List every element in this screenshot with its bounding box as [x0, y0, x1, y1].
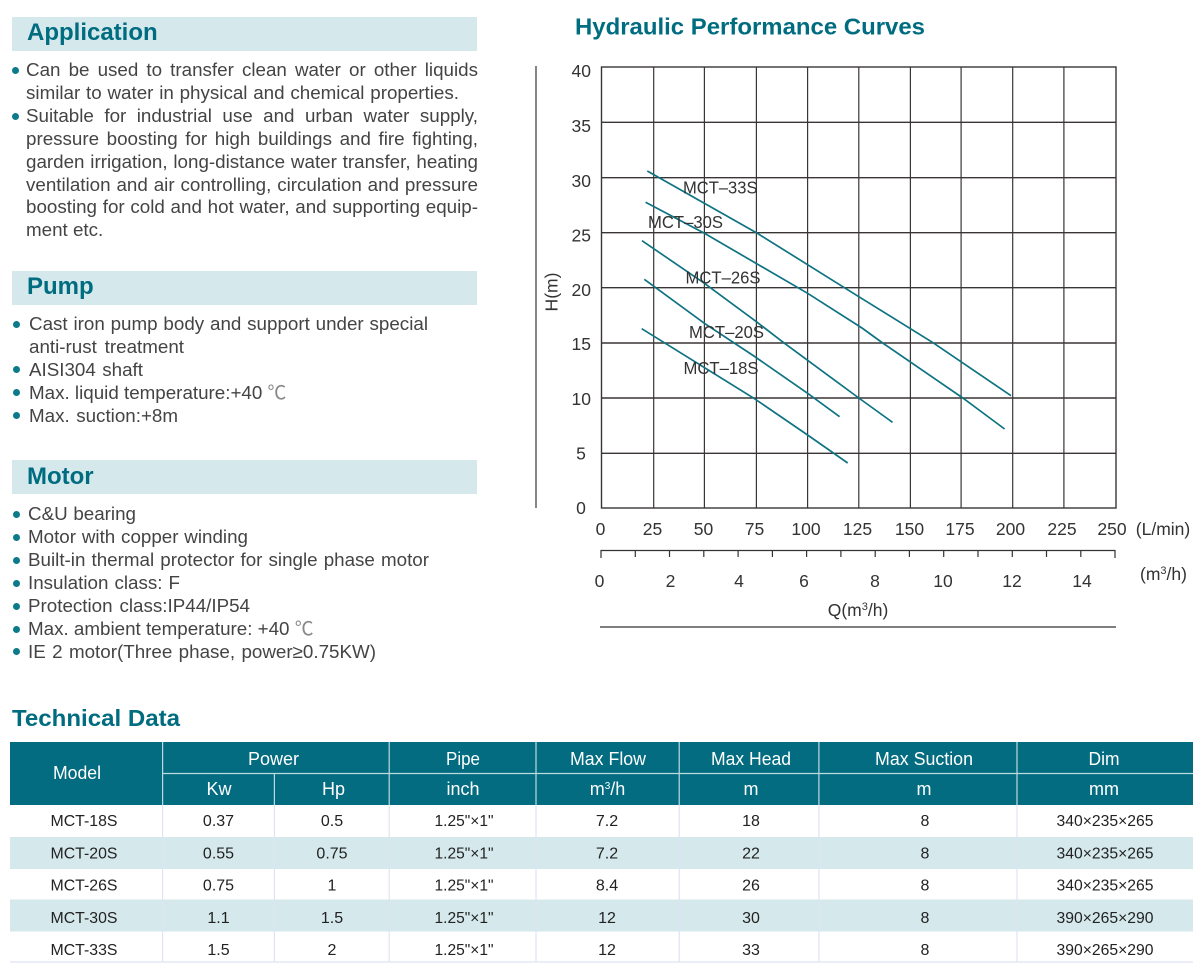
curve labels: MCT–20S [689, 322, 764, 342]
row: MCT-26S: 8.4 [596, 878, 618, 894]
row: MCT-18S: 1.25"×1" [434, 813, 494, 830]
row: MCT-30S: 30 [742, 910, 760, 927]
curve labels [648, 178, 764, 378]
x axis labels: m3/h [595, 564, 1187, 591]
x axis labels: m3/h: (m [1140, 564, 1160, 584]
performance curves [642, 171, 1011, 463]
row: MCT-26S: 26 [742, 878, 760, 894]
table header: Max Head [711, 749, 791, 769]
x axis title: Q(m [828, 600, 862, 620]
heading: motor: Motor [27, 463, 94, 490]
panel: pump [12, 271, 477, 426]
row: MCT-33S: 1.5 [207, 942, 230, 959]
bullet list: motor features: Insulation class: F [28, 572, 180, 593]
bullet list: motor features: IE 2 motor(Three phase, power≥0.75KW) [28, 641, 376, 662]
y axis labels: 40 [572, 61, 591, 81]
bullet list: motor features: Motor with copper winding [28, 526, 248, 547]
table header: Power [248, 749, 299, 769]
flow ruler [601, 550, 1115, 558]
x axis labels: L/min: 100 [791, 519, 821, 539]
bullet list: motor features: Protection class:IP44/IP54 [28, 595, 250, 616]
text: suitable uses: ment etc. [26, 219, 103, 240]
row: MCT-26S: 340×235×265 [1056, 878, 1154, 894]
table header: 3 [605, 781, 611, 792]
text: clean water use: Can be used to transfer clean water or other liquids [26, 59, 478, 80]
curve labels: MCT–26S [686, 268, 760, 288]
table header: Max Flow [570, 749, 647, 769]
row: MCT-18S: 340×235×265 [1056, 813, 1154, 830]
row: MCT-30S [50, 910, 1154, 927]
x axis labels: L/min: 25 [643, 519, 662, 539]
table: technical data [10, 742, 1193, 962]
row: MCT-30S: 8 [921, 910, 930, 927]
row: MCT-33S: 390×265×290 [1056, 942, 1154, 959]
row: MCT-26S: 8 [921, 878, 930, 894]
table header: m [590, 779, 605, 799]
text: suitable uses: pressure boosting for high buildings and fire fighting, [26, 128, 478, 149]
x axis labels: L/min: 225 [1047, 519, 1077, 539]
row: MCT-33S: MCT-33S [50, 942, 118, 959]
row: MCT-18S: 8 [921, 813, 930, 830]
left axis rule [535, 66, 537, 508]
y axis labels: 35 [572, 116, 591, 136]
row: MCT-30S: MCT-30S [50, 910, 118, 927]
row: MCT-30S: 1.5 [321, 910, 343, 927]
x axis labels: L/min: (L/min) [1136, 519, 1190, 539]
y axis labels: 20 [572, 280, 591, 300]
x axis labels: m3/h: 14 [1072, 571, 1092, 591]
row: MCT-26S: 1 [328, 878, 337, 894]
bullet list: motor features: Built-in thermal protector for single phase motor [28, 549, 429, 570]
x axis labels: m3/h: 3 [1160, 565, 1167, 577]
curve labels: MCT–18S [684, 358, 758, 378]
table header: Hp [322, 779, 345, 799]
row: MCT-33S: 2 [328, 942, 337, 959]
x axis labels: L/min: 175 [945, 519, 975, 539]
row: MCT-18S: 0.5 [321, 813, 343, 830]
x axis labels: m3/h: 0 [595, 571, 605, 591]
x axis title: 3 [862, 601, 868, 613]
row: MCT-33S: 1.25"×1" [434, 942, 494, 959]
row: MCT-26S: 1.25"×1" [434, 878, 494, 894]
text: suitable uses: garden irrigation, long-distance water transfer, heating [26, 151, 478, 172]
text: suitable uses: ventilation and air controlling, circulation and pressure [26, 174, 478, 195]
table header: mm [1089, 779, 1119, 799]
row: MCT-20S [50, 846, 1154, 862]
bullet list: pump features: Cast iron pump body and support under special [29, 313, 428, 334]
x axis labels: m3/h: /h) [1167, 564, 1187, 584]
table header: inch [446, 779, 480, 799]
x axis title: /h) [868, 600, 888, 620]
row: MCT-30S: 1.1 [207, 910, 230, 927]
row: MCT-20S: 7.2 [596, 846, 618, 862]
bullet list: pump features: Max. suction:+8m [29, 405, 178, 426]
row: MCT-20S: 0.75 [316, 846, 348, 862]
y axis labels: 5 [576, 444, 586, 464]
table rules [10, 805, 1193, 962]
heading: application: Application [27, 19, 158, 46]
row: MCT-26S [50, 878, 1154, 894]
y axis labels: 15 [572, 334, 591, 354]
row: MCT-26S: 0.75 [203, 878, 234, 894]
bullet list: pump features: AISI304 shaft [29, 359, 143, 380]
row: MCT-33S: 33 [742, 942, 760, 959]
x axis labels: m3/h: 12 [1002, 571, 1022, 591]
row: MCT-30S: 12 [598, 910, 616, 927]
x axis labels: L/min: 75 [745, 519, 764, 539]
x axis labels: L/min: 150 [895, 519, 924, 539]
table header: m [744, 779, 758, 799]
table header: Kw [206, 779, 232, 799]
bullet: application 1 [12, 66, 19, 74]
curve labels: MCT–30S [648, 212, 723, 232]
y axis labels: 30 [572, 171, 591, 191]
text: clean water use: similar to water in physical and chemical properties. [26, 82, 459, 103]
y axis labels: 0 [576, 498, 586, 518]
x axis labels: L/min: 125 [843, 519, 872, 539]
bullet: application 2 [12, 112, 19, 120]
row: MCT-33S [50, 942, 1154, 959]
row: MCT-18S [50, 813, 1154, 830]
table header: Max Suction [875, 749, 973, 769]
x axis labels: m3/h: 8 [870, 571, 880, 591]
bullet list: motor features [13, 503, 429, 662]
bullet list: motor features: C&U bearing [28, 503, 136, 524]
heading: pump [12, 271, 477, 305]
row: MCT-26S: MCT-26S [50, 878, 118, 894]
table header: /h [610, 779, 625, 799]
heading: pump: Pump [27, 273, 94, 300]
row: MCT-20S: 0.55 [203, 846, 234, 862]
bottom rule [600, 626, 1116, 628]
row bands [10, 837, 1193, 932]
x axis labels: m3/h: 6 [799, 571, 809, 591]
panel: motor [12, 460, 477, 662]
table header: Dim [1088, 749, 1120, 769]
x axis labels: m3/h: 2 [666, 571, 675, 591]
y axis title: H(m) [542, 273, 562, 311]
row: MCT-18S: MCT-18S [50, 813, 118, 830]
x axis labels: L/min: 0 [596, 519, 606, 539]
heading: technical data: Technical Data [12, 705, 180, 731]
panel: application [12, 17, 478, 240]
heading: application [12, 17, 477, 51]
text: suitable uses [26, 105, 478, 240]
row: MCT-20S: 340×235×265 [1056, 846, 1154, 862]
table header [10, 742, 1193, 805]
x axis labels: L/min: 250 [1097, 519, 1127, 539]
bullet list: pump features: Max. liquid temperature:+40 ℃ [29, 382, 286, 403]
heading: motor [12, 460, 477, 494]
y axis labels: 25 [572, 226, 591, 246]
row: MCT-33S: 12 [598, 942, 616, 959]
y axis labels: 10 [572, 389, 591, 409]
x axis labels: m3/h: 10 [933, 571, 953, 591]
bullet list: pump features: anti-rust treatment [29, 336, 184, 357]
table header: Model [53, 763, 101, 783]
row: MCT-33S: 8 [921, 942, 930, 959]
row: MCT-18S: 18 [742, 813, 760, 830]
text: suitable uses: Suitable for industrial use and urban water supply, [26, 105, 478, 126]
table header: m [916, 779, 932, 799]
text: suitable uses: boosting for cold and hot water, and supporting equip- [26, 196, 478, 217]
heading: hydraulic performance curves: Hydraulic Performance Curves [575, 14, 925, 40]
row: MCT-18S: 0.37 [203, 813, 234, 830]
x axis labels: L/min: 50 [694, 519, 713, 539]
row: MCT-20S: 8 [921, 846, 930, 862]
row: MCT-30S: 390×265×290 [1056, 910, 1154, 927]
row: MCT-20S: 22 [742, 846, 760, 862]
x axis labels: m3/h: 4 [734, 571, 744, 591]
text: clean water use [26, 59, 478, 103]
bullet list: motor features: Max. ambient temperature: +40 ℃ [28, 618, 314, 639]
x axis labels: L/min: 200 [996, 519, 1025, 539]
row: MCT-20S: 1.25"×1" [434, 846, 494, 862]
table header: Pipe [446, 749, 480, 769]
row: MCT-30S: 1.25"×1" [434, 910, 494, 927]
chart grid [602, 67, 1116, 508]
x axis labels: L/min [596, 519, 1190, 539]
row: MCT-20S: MCT-20S [50, 846, 118, 862]
y axis labels [572, 61, 591, 518]
chart: hydraulic performance curves [536, 61, 1190, 627]
row: MCT-18S: 7.2 [596, 813, 618, 830]
curve labels: MCT–33S [683, 178, 758, 198]
bullet list: pump features [13, 313, 428, 426]
